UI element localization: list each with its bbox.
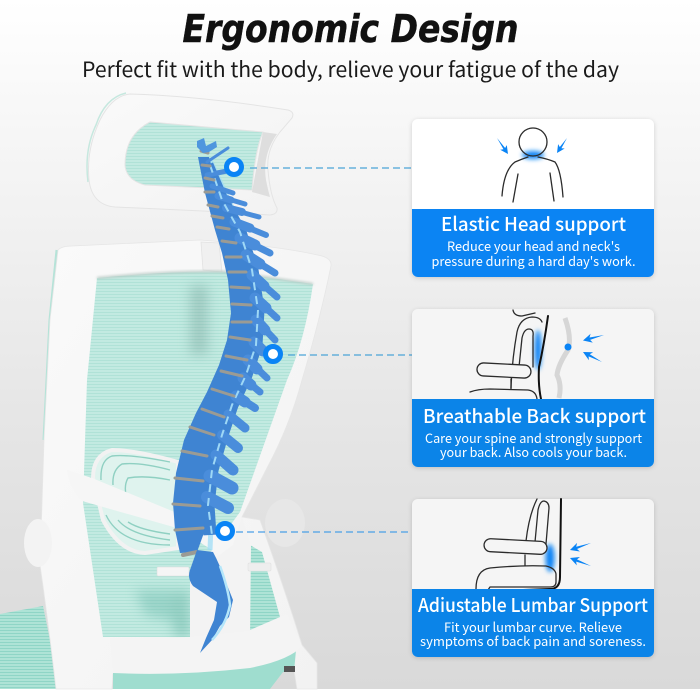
heading: Adiustable Lumbar Support — [418, 591, 648, 618]
connector: head — [226, 160, 412, 174]
card footer — [412, 209, 654, 277]
heading: Breathable Back support — [423, 402, 646, 429]
card background — [412, 309, 654, 467]
panel: adjustable lumbar support — [412, 499, 654, 657]
description: pressure during a hard day's work. — [432, 251, 636, 270]
headrest inner shade — [252, 132, 277, 197]
mesh top shade — [97, 272, 313, 284]
description: your back. Also cools your back. — [440, 442, 627, 461]
card footer — [412, 589, 654, 657]
icon: person neck — [497, 128, 567, 202]
lumbar pad — [93, 450, 178, 553]
description: Reduce your head and neck's — [447, 236, 620, 255]
neural arch band — [207, 165, 258, 535]
spinous processes — [207, 148, 277, 508]
headrest frame — [88, 94, 293, 215]
frame strut — [67, 470, 237, 565]
mesh shadows — [135, 285, 208, 637]
back frame rim — [44, 250, 57, 440]
panel: elastic head support — [412, 119, 654, 277]
back mesh — [83, 272, 313, 637]
sacrum — [189, 550, 233, 653]
title: Ergonomic Design — [182, 7, 518, 51]
description: Fit your lumbar curve. Relieve — [444, 617, 622, 636]
icon: seated lumbar — [476, 499, 591, 590]
card footer — [412, 399, 654, 467]
lower right mesh — [250, 545, 280, 630]
bottom frame — [110, 615, 302, 674]
spine illustration — [173, 138, 277, 653]
icon: seated back with spine — [470, 310, 604, 399]
bracket tabs — [157, 563, 271, 576]
connector: back — [266, 346, 412, 362]
center column — [190, 517, 251, 642]
seat front — [113, 650, 296, 689]
description: symptoms of back pain and soreness. — [420, 631, 646, 650]
right pivot knob — [265, 499, 305, 547]
frame joint — [201, 242, 222, 272]
heading: Elastic Head support — [441, 210, 626, 237]
seat left — [0, 606, 60, 689]
process bases — [218, 196, 266, 402]
vertebral column — [173, 157, 254, 553]
card background — [412, 119, 654, 277]
atlas vertebra — [197, 138, 217, 153]
sacrum highlights — [212, 566, 230, 640]
headrest rim — [87, 93, 126, 182]
left pivot knob — [24, 519, 52, 567]
intervertebral discs — [173, 151, 251, 555]
facet joints — [208, 165, 258, 535]
subtitle: Perfect fit with the body, relieve your fatigue of the day — [82, 54, 619, 84]
panel: breathable back support — [412, 309, 654, 467]
connector: lumbar — [218, 524, 412, 538]
office chair — [0, 93, 331, 689]
back frame — [40, 240, 331, 689]
spine glow — [210, 160, 262, 550]
headrest mesh — [125, 122, 263, 190]
card background — [412, 499, 654, 657]
description: Care your spine and strongly support — [425, 428, 642, 447]
seat mechanism — [284, 666, 295, 672]
